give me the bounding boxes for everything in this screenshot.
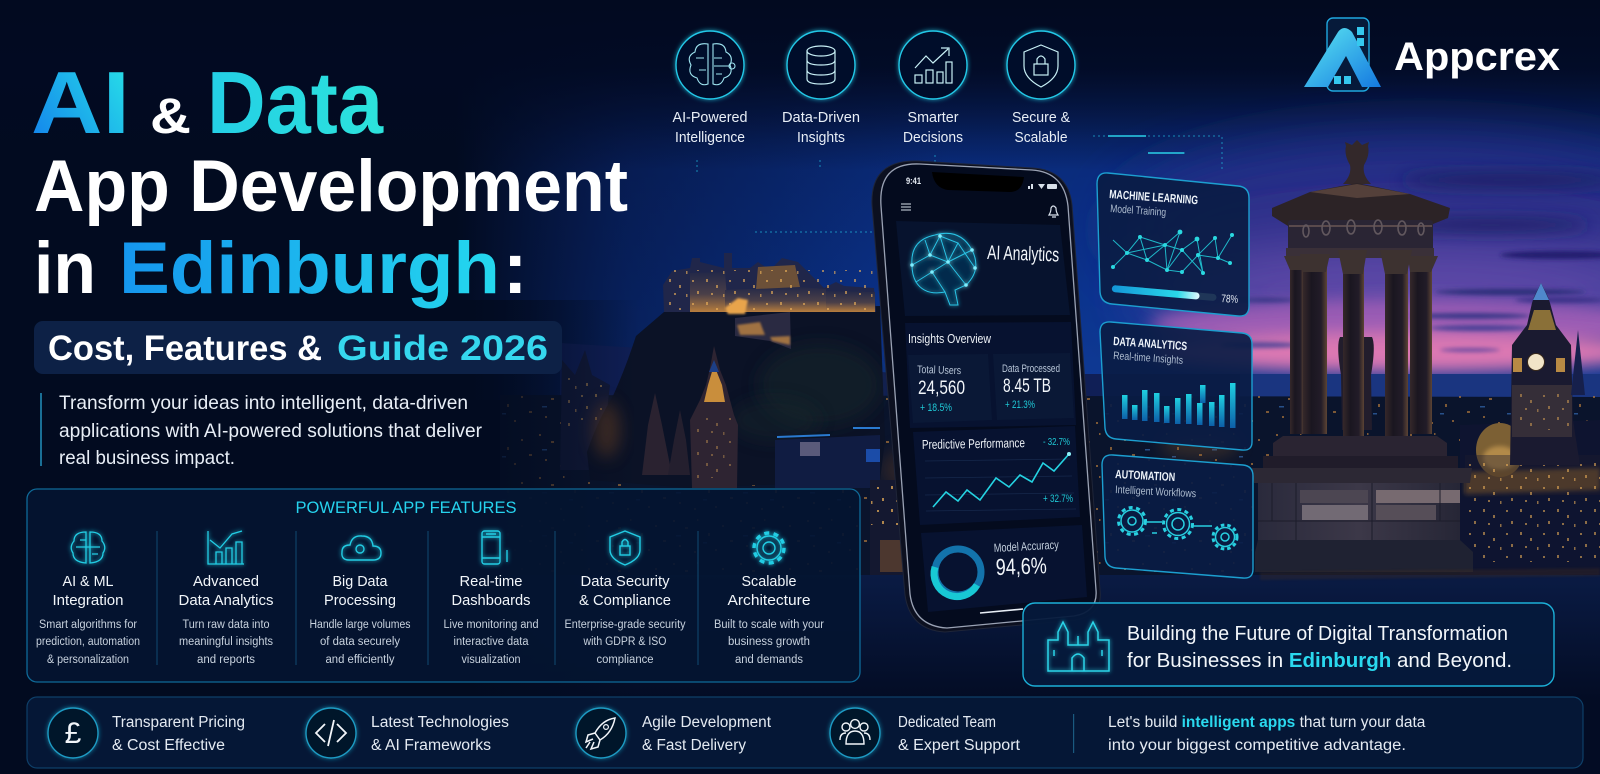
- Balmoral building: [1460, 420, 1600, 575]
- feature: data security and compliance: compliance: [596, 654, 654, 666]
- glass panel: data analytics: Real-time Insights: [1113, 350, 1184, 367]
- Edinburgh castle: [663, 253, 876, 312]
- feature: big data processing: of data securely: [320, 636, 400, 648]
- feature: real-time dashboards: interactive data: [454, 636, 529, 648]
- callout: digital transformation: [1023, 603, 1554, 686]
- feature: real-time dashboards: Real-time: [460, 573, 522, 590]
- feature: AI and ML integration: Smart algorithms for: [39, 619, 137, 631]
- clock tower: [1510, 283, 1580, 465]
- gears workflow: [1118, 508, 1237, 549]
- subtitle bar: Cost, Features &: [48, 329, 322, 368]
- stat: total users: + 18.5%: [920, 402, 952, 414]
- stat: total users: 24,560: [918, 378, 965, 399]
- blue roofs: [775, 435, 880, 488]
- intro paragraph: [40, 392, 482, 469]
- glass panel: data analytics: DATA ANALYTICS: [1113, 334, 1188, 353]
- title: App Development: [34, 146, 628, 227]
- benefit: AI-Powered Intelligence: [672, 31, 748, 146]
- icon: castle outline: [1048, 622, 1109, 671]
- item: dedicated team: & Expert Support: [898, 737, 1021, 754]
- subtitle bar: Guide 2026: [337, 329, 548, 368]
- stat: data processed: 8.45 TB: [1003, 376, 1051, 397]
- intro paragraph: applications with AI-powered solutions that deliver: [59, 420, 482, 442]
- feature: scalable architecture: Scalable: [742, 573, 796, 590]
- feature: advanced data analytics: Data Analytics: [178, 592, 274, 609]
- title: Data: [207, 53, 384, 152]
- feature: advanced data analytics: Advanced: [193, 573, 259, 590]
- feature: AI and ML integration: AI & ML: [62, 573, 114, 590]
- neural brain: [910, 233, 977, 305]
- feature: big data processing: [310, 536, 411, 666]
- progress bar: [1112, 285, 1217, 301]
- predictive performance chart: [913, 426, 1080, 525]
- item: latest technologies: & AI Frameworks: [371, 737, 491, 754]
- item: dedicated team: Dedicated Team: [898, 714, 996, 731]
- stat: total users: [908, 354, 992, 423]
- model accuracy card: 94,6%: [995, 552, 1047, 580]
- tech circuit lines: [697, 136, 1222, 232]
- feature: data security and compliance: Data Security: [580, 573, 670, 590]
- item: agile development: Agile Development: [642, 714, 772, 731]
- item: transparent pricing: [48, 708, 245, 758]
- bell icon: [1049, 206, 1058, 217]
- stat: data processed: Data Processed: [1002, 363, 1060, 375]
- donut chart: [934, 549, 981, 597]
- feature: real-time dashboards: Live monitoring and: [444, 619, 538, 631]
- analytics hero card: AI Analytics: [987, 242, 1060, 267]
- benefit: Secure & Scalable: Scalable: [1014, 130, 1068, 146]
- bar chart: [1122, 383, 1236, 428]
- benefit: Secure & Scalable: Secure &: [1012, 110, 1070, 126]
- title: &: [150, 88, 191, 144]
- feature: advanced data analytics: [178, 531, 274, 666]
- item: transparent pricing: Transparent Pricing: [112, 714, 245, 731]
- analytics hero card: [896, 221, 1070, 316]
- ground and left fade: [0, 575, 1600, 774]
- model accuracy card: [921, 525, 1087, 612]
- glass panel: automation: [1102, 455, 1253, 578]
- feature: real-time dashboards: [444, 531, 538, 666]
- predictive performance chart: Predictive Performance: [922, 435, 1025, 452]
- castle rock: [587, 306, 885, 488]
- feature: AI and ML integration: & personalization: [47, 654, 129, 666]
- feature: big data processing: Handle large volumes: [310, 619, 411, 631]
- item: transparent pricing: & Cost Effective: [112, 737, 225, 754]
- title: :: [503, 228, 527, 309]
- distant left buildings: [560, 350, 610, 470]
- benefit: Secure & Scalable: [1007, 31, 1075, 146]
- feature: data security and compliance: with GDPR & ISO: [583, 636, 667, 648]
- title: [31, 53, 628, 309]
- feature: big data processing: Big Data: [332, 573, 388, 590]
- dark cloud streaks: [1220, 173, 1600, 352]
- feature: big data processing: and efficiently: [326, 654, 395, 666]
- closing message: into your biggest competitive advantage.: [1108, 737, 1406, 754]
- intro paragraph: Transform your ideas into intelligent, data-driven: [59, 392, 468, 414]
- title: AI: [31, 53, 130, 152]
- feature: scalable architecture: Architecture: [728, 592, 810, 609]
- feature: data security and compliance: & Compliance: [579, 592, 671, 609]
- smartphone mockup: 9:41: [906, 176, 922, 187]
- top benefit icons: [672, 31, 1075, 146]
- Dugald Stewart monument: [1252, 140, 1600, 580]
- glass panel: machine learning: MACHINE LEARNING: [1109, 187, 1199, 207]
- stat: total users: Total Users: [917, 364, 962, 377]
- logo: Appcrex: Appcrex: [1394, 35, 1560, 79]
- item: latest technologies: [306, 708, 509, 758]
- benefit: Data-Driven Insights: Data-Driven: [782, 110, 860, 126]
- feature: AI and ML integration: prediction, automation: [36, 636, 140, 648]
- glass panel: machine learning: Model Training: [1110, 203, 1166, 219]
- title: Edinburgh: [119, 228, 500, 309]
- title: in: [34, 228, 96, 309]
- intro paragraph: real business impact.: [59, 447, 235, 469]
- benefit: AI-Powered Intelligence: AI-Powered: [672, 110, 748, 126]
- stat: data processed: [993, 353, 1074, 420]
- feature: scalable architecture: Built to scale with your: [714, 619, 824, 631]
- predictive performance chart: + 32.7%: [1043, 493, 1073, 505]
- feature: scalable architecture: and demands: [735, 654, 803, 666]
- item: agile development: & Fast Delivery: [642, 737, 746, 754]
- network line chart: [1111, 230, 1234, 275]
- glass panel: automation: Intelligent Workflows: [1115, 484, 1197, 500]
- model accuracy card: Model Accuracy: [993, 538, 1059, 555]
- benefit: Smarter Decisions: Decisions: [903, 130, 963, 146]
- panel: powerful app features: POWERFUL APP FEATURES: [296, 498, 516, 517]
- predictive performance chart: - 32.7%: [1043, 437, 1070, 448]
- closing message: [1108, 714, 1426, 754]
- insights card: Insights Overview: [908, 331, 991, 346]
- feature: scalable architecture: business growth: [728, 636, 810, 648]
- item: dedicated team: [830, 708, 1021, 758]
- church spire: [690, 346, 738, 488]
- logo: Appcrex: [1304, 18, 1560, 91]
- item: transparent pricing: £: [65, 717, 82, 750]
- glass panel: automation: AUTOMATION: [1115, 467, 1175, 484]
- feature: data security and compliance: Enterprise-grade security: [564, 619, 686, 631]
- panel: powerful app features: [27, 489, 860, 682]
- glass panel: machine learning: 78%: [1221, 293, 1239, 306]
- hills: [560, 343, 1600, 400]
- menu icon: [901, 204, 911, 210]
- glass panel: data analytics: [1100, 322, 1252, 450]
- feature: advanced data analytics: and reports: [197, 654, 255, 666]
- panel: why choose us strip: [27, 697, 1583, 768]
- feature: scalable architecture: [714, 533, 824, 666]
- feature: real-time dashboards: visualization: [462, 654, 520, 666]
- benefit: Data-Driven Insights: Insights: [797, 130, 845, 146]
- status icons: [1028, 184, 1057, 189]
- benefit: Data-Driven Insights: [782, 31, 860, 146]
- stat: data processed: + 21.3%: [1005, 399, 1035, 411]
- benefit: AI-Powered Intelligence: Intelligence: [675, 130, 745, 146]
- glass panel: machine learning: [1097, 173, 1249, 316]
- callout: digital transformation: for Businesses in Edinburgh and Beyond.: [1127, 649, 1512, 672]
- smartphone mockup: [872, 161, 1100, 632]
- callout: digital transformation: Building the Future of Digital Transformation: [1127, 622, 1508, 645]
- item: latest technologies: Latest Technologies: [371, 714, 509, 731]
- closing message: Let's build intelligent apps that turn your data: [1108, 714, 1426, 731]
- insights card: [905, 322, 1076, 428]
- feature: big data processing: Processing: [324, 592, 396, 609]
- feature: real-time dashboards: Dashboards: [452, 592, 530, 609]
- benefit: Smarter Decisions: [899, 31, 967, 146]
- notch: [932, 172, 1024, 192]
- subtitle bar: [34, 321, 562, 374]
- feature: AI and ML integration: [36, 532, 140, 666]
- feature: data security and compliance: [564, 531, 686, 666]
- old town city block: [500, 395, 1600, 590]
- feature: AI and ML integration: Integration: [52, 592, 124, 609]
- benefit: Smarter Decisions: Smarter: [908, 110, 959, 126]
- item: agile development: [576, 708, 772, 758]
- feature: advanced data analytics: Turn raw data into: [182, 619, 270, 631]
- feature: advanced data analytics: meaningful insights: [179, 636, 273, 648]
